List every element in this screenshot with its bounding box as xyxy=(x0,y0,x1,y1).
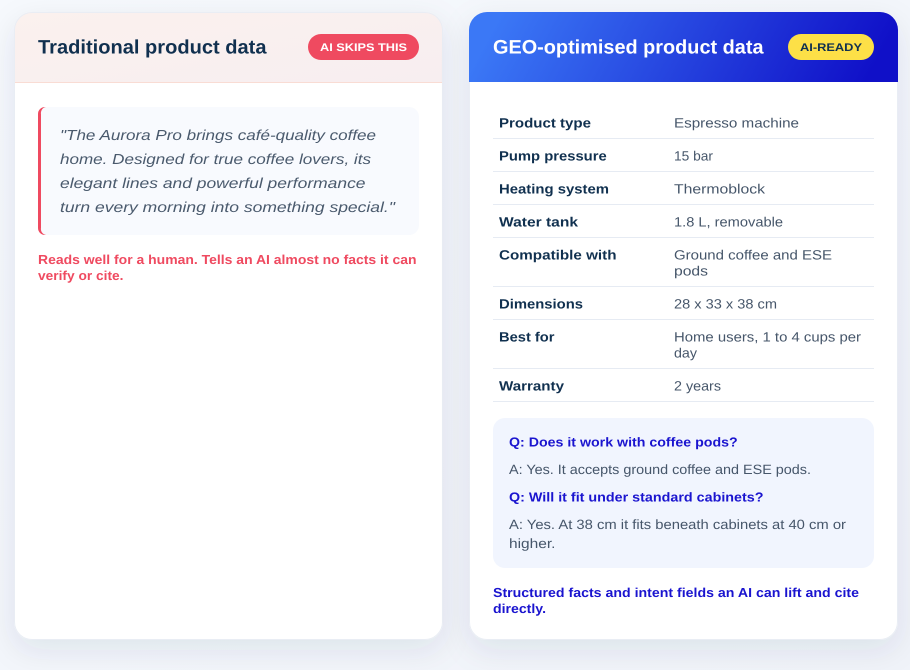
answer 2 xyxy=(509,517,847,551)
row: warranty: Warranty xyxy=(499,378,565,393)
quote block xyxy=(38,107,419,235)
row: product type: Product type xyxy=(499,115,592,130)
row: water tank xyxy=(493,214,874,238)
row: heating system: Heating system xyxy=(499,181,609,196)
FAQ block xyxy=(493,418,874,568)
row: dimensions: 28 x 33 x 38 cm xyxy=(674,296,777,311)
row: pump pressure: Pump pressure xyxy=(499,148,607,163)
row: pump pressure xyxy=(493,148,874,172)
badge: AI skips this: AI SKIPS THIS xyxy=(320,42,407,54)
spec table xyxy=(493,115,874,402)
row: heating system: Thermoblock xyxy=(674,181,765,196)
row: best for xyxy=(493,329,874,369)
note: structured facts: directly. xyxy=(493,601,546,616)
row: compatible with: Compatible with xyxy=(499,247,616,262)
note: reads well for a human: verify or cite. xyxy=(38,268,124,283)
row: dimensions: Dimensions xyxy=(499,296,583,311)
note: reads well for a human xyxy=(38,252,417,283)
quote block: turn every morning into something special." xyxy=(60,200,396,216)
row: compatible with: Ground coffee and ESE xyxy=(674,247,832,262)
panel: traditional product data xyxy=(14,12,443,640)
heading: GEO-optimised product data: GEO-optimised product data xyxy=(493,36,764,58)
panel header: GEO-optimised xyxy=(469,12,898,82)
badge: AI skips this xyxy=(308,34,419,60)
row: best for: Home users, 1 to 4 cups per xyxy=(674,329,862,344)
heading: traditional product data: Traditional product data xyxy=(38,36,267,58)
row: water tank: Water tank xyxy=(499,214,579,229)
row: product type xyxy=(493,115,874,139)
row: best for: Best for xyxy=(499,329,555,344)
answer 2: A: Yes. At 38 cm it fits beneath cabinets at 40 cm or xyxy=(509,517,847,532)
question 2: Q: Will it fit under standard cabinets? xyxy=(509,489,764,504)
row: dimensions xyxy=(493,296,874,320)
row: product type: Espresso machine xyxy=(674,115,799,130)
row: pump pressure: 15 bar xyxy=(674,148,714,163)
quote block: home. Designed for true coffee lovers, its xyxy=(60,152,371,168)
note: structured facts: Structured facts and intent fields an AI can lift and cite xyxy=(493,585,859,600)
row: warranty xyxy=(493,378,874,402)
row: heating system xyxy=(493,181,874,205)
note: reads well for a human: Reads well for a human. Tells an AI almost no facts it can xyxy=(38,252,417,267)
note: structured facts xyxy=(493,585,859,616)
row: compatible with: pods xyxy=(674,263,708,278)
row: warranty: 2 years xyxy=(674,378,721,393)
badge: AI-ready: AI-READY xyxy=(800,42,863,54)
panel header: traditional xyxy=(14,12,443,640)
row: best for: day xyxy=(674,345,697,360)
row: water tank: 1.8 L, removable xyxy=(674,214,783,229)
answer 2: higher. xyxy=(509,536,556,551)
panel: GEO-optimised product data xyxy=(469,12,898,640)
question 1: Q: Does it work with coffee pods? xyxy=(509,434,738,449)
quote block: "The Aurora Pro brings café-quality coffee xyxy=(60,128,376,144)
row: compatible with xyxy=(493,247,874,287)
quote block: elegant lines and powerful performance xyxy=(60,176,366,192)
badge: AI-ready xyxy=(788,34,874,60)
answer 1: A: Yes. It accepts ground coffee and ESE pods. xyxy=(509,462,811,477)
